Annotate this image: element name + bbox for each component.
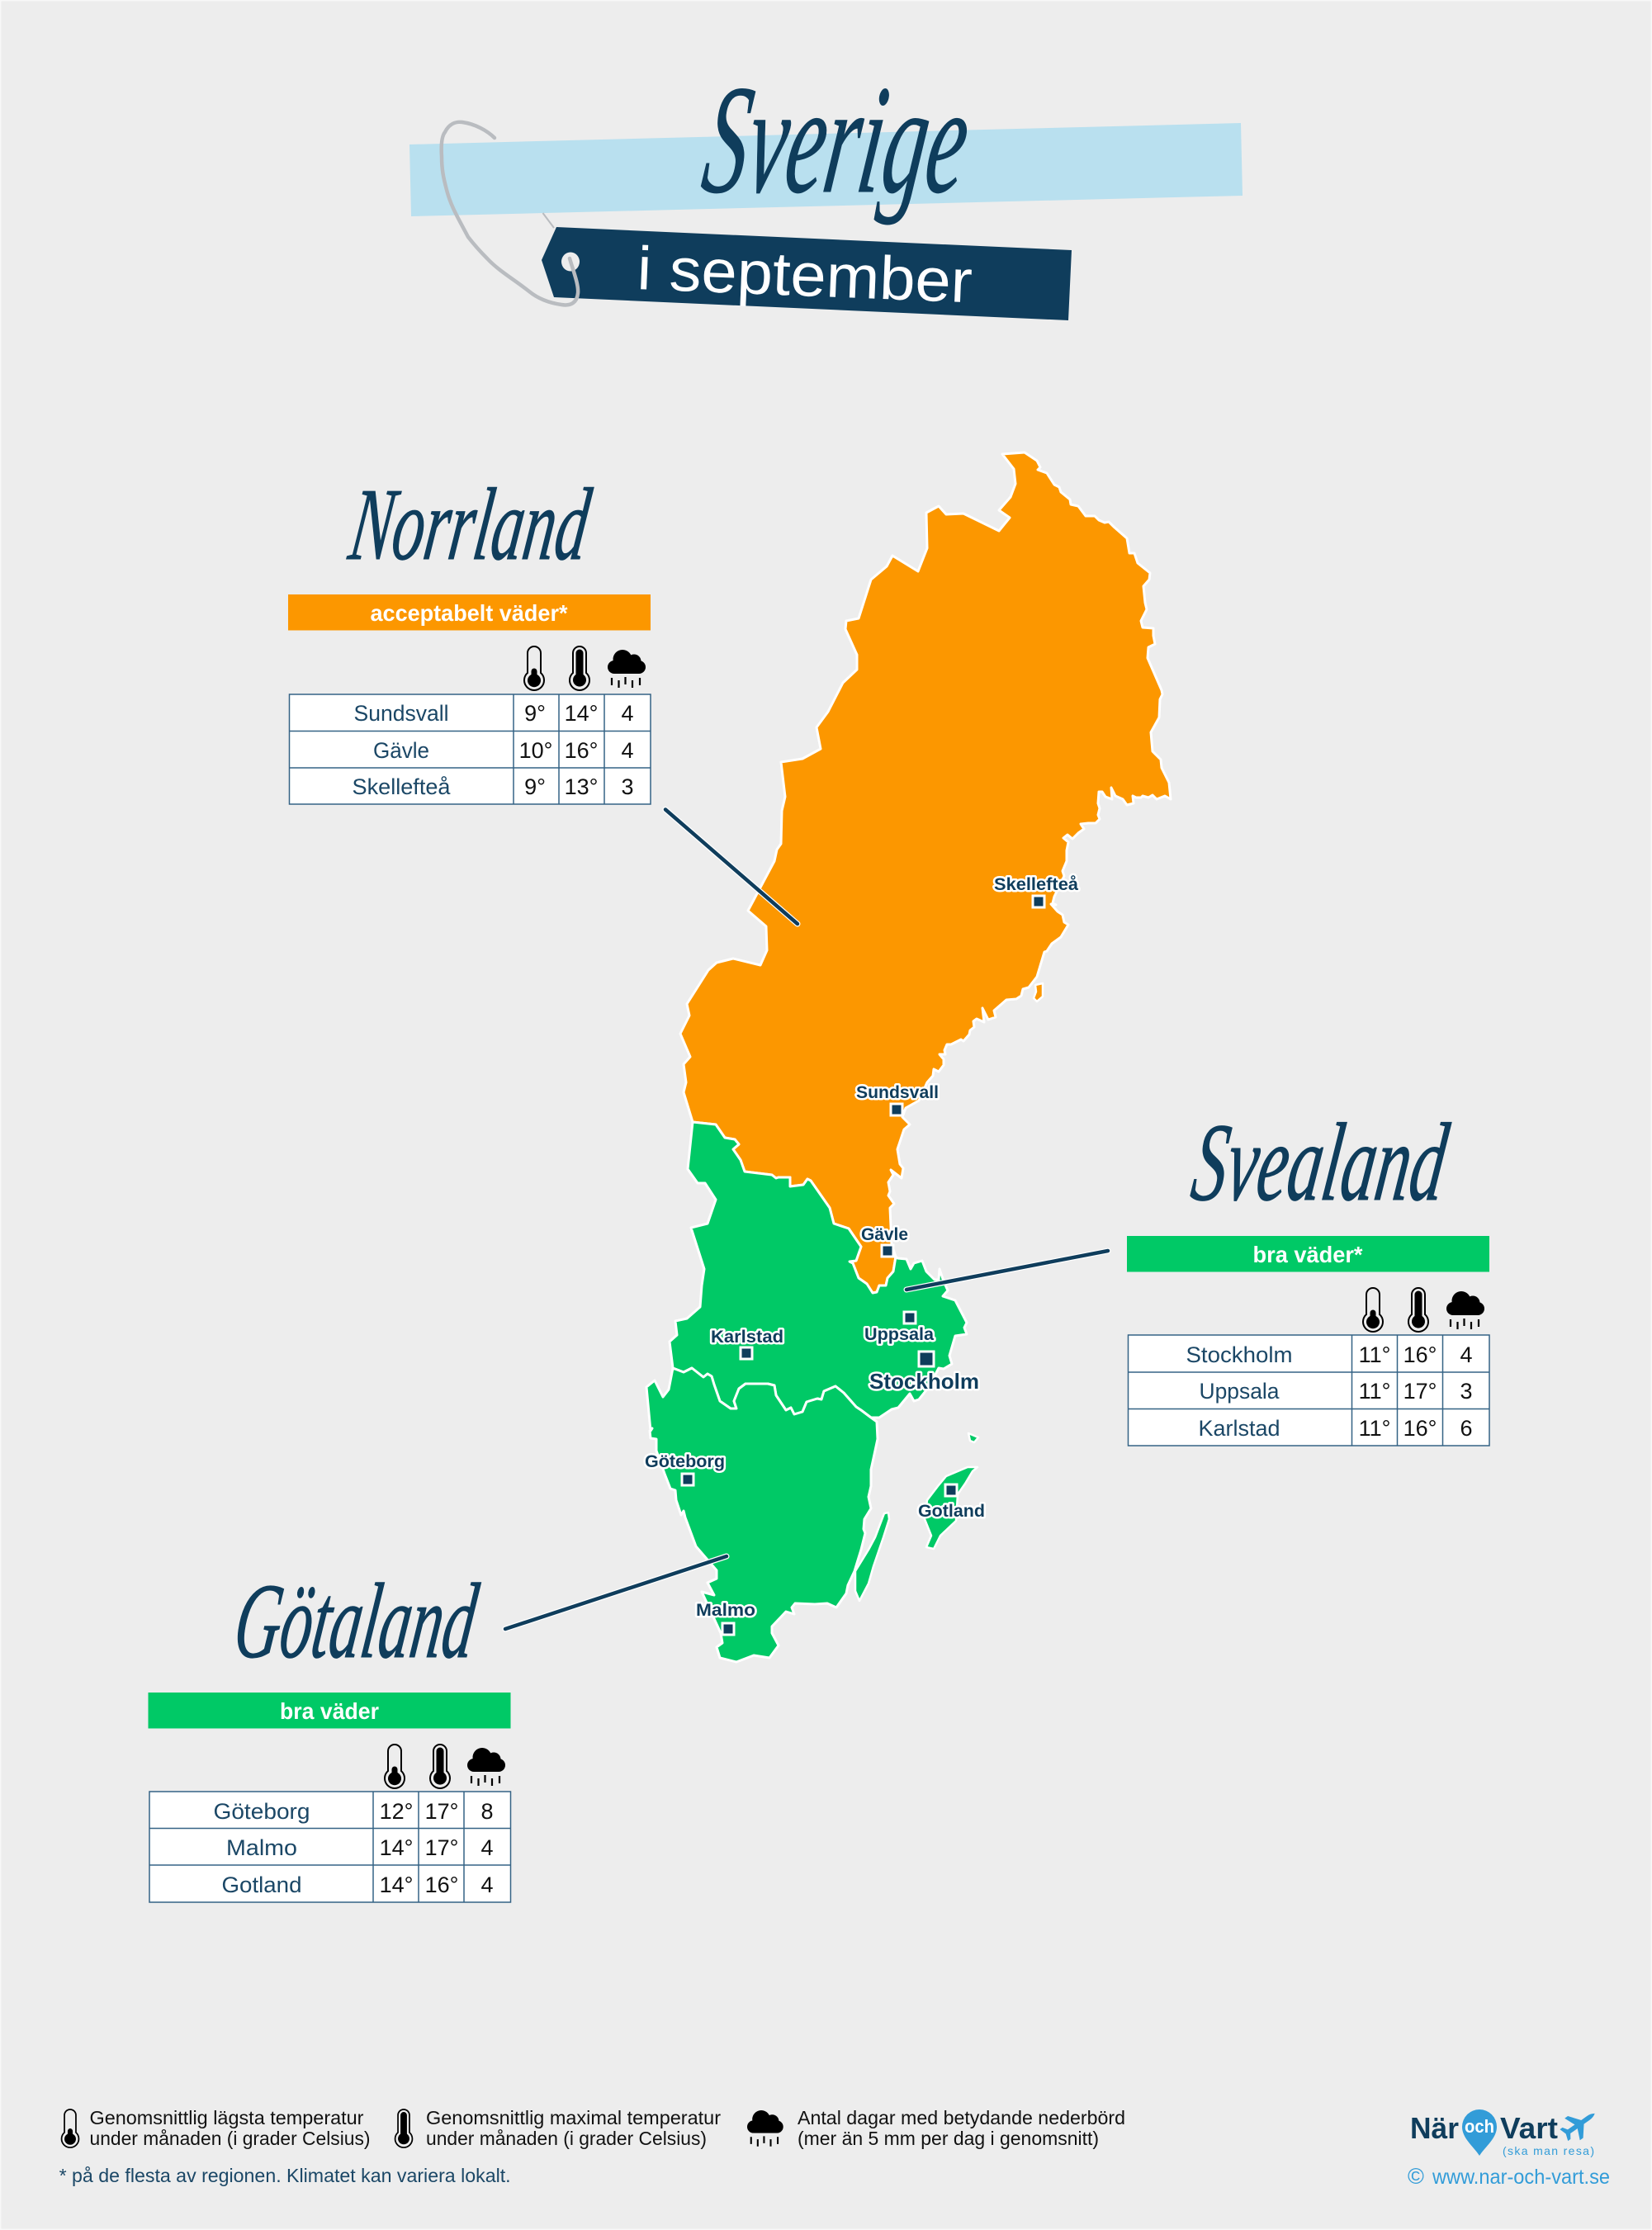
table: Norrland cities: Skellefteå	[352, 774, 451, 799]
copyright mark: ©	[1408, 2164, 1424, 2189]
panel: Svealand	[1127, 1101, 1489, 1446]
city marker: Malmo: Malmo	[696, 1601, 755, 1620]
table: Norrland cities: 3	[621, 774, 634, 799]
icon: low temperature	[385, 1745, 405, 1788]
table: Norrland cities: 13°	[565, 774, 598, 799]
table: Svealand cities: 11°	[1359, 1379, 1390, 1404]
table: Norrland cities: Sundsvall	[353, 701, 449, 726]
icon: airplane	[1556, 2103, 1602, 2146]
map of Sweden	[645, 452, 1171, 1662]
city marker: Skellefteå: Skellefteå	[994, 875, 1078, 894]
table: Norrland cities: 16°	[565, 738, 598, 763]
icon: rain cloud	[608, 650, 646, 688]
icon: low temperature	[524, 646, 544, 690]
logo pin	[1462, 2109, 1497, 2156]
island: Gotland	[925, 1467, 977, 1549]
legend item: low temperature	[62, 2107, 370, 2149]
region: Götaland	[646, 1368, 878, 1662]
table: Svealand cities: Uppsala	[1199, 1379, 1280, 1404]
table: Götaland cities: 17°	[425, 1835, 458, 1860]
logo word: När: När	[1410, 2111, 1459, 2145]
region: Svealand	[670, 1122, 967, 1418]
table: Svealand cities: 4	[1460, 1342, 1473, 1367]
logo word: och: och	[1465, 2116, 1494, 2137]
heading: Svealand: Svealand	[1186, 1101, 1455, 1224]
weather bar: bra väder	[149, 1693, 510, 1729]
panel: Norrland	[288, 468, 651, 804]
legend item: high temperature	[395, 2107, 721, 2149]
heading: Sverige: Sverige	[694, 54, 979, 225]
table: Götaland cities	[149, 1792, 510, 1902]
table: Götaland cities: 12°	[380, 1799, 413, 1824]
table: Götaland cities: Göteborg	[213, 1799, 310, 1824]
legend item: high temperature: Genomsnittlig maximal temperatur	[426, 2107, 721, 2128]
subheading: i september: i september	[636, 234, 973, 315]
table: Norrland cities: 9°	[524, 774, 546, 799]
table: Svealand cities: 6	[1460, 1416, 1473, 1441]
table: Götaland cities: 8	[480, 1799, 494, 1824]
region: Norrland	[680, 452, 1171, 1293]
light blue ribbon	[409, 123, 1243, 216]
city marker: Gotland	[918, 1484, 985, 1521]
city marker: Gotland: Gotland	[918, 1502, 985, 1521]
icon: low temperature	[1363, 1288, 1383, 1332]
legend item: rain days	[747, 2107, 1125, 2149]
table: Svealand cities: 11°	[1359, 1416, 1390, 1441]
table: Götaland cities: 14°	[380, 1873, 413, 1897]
title banner	[409, 54, 1243, 320]
leader line: Götaland	[505, 1556, 727, 1629]
city marker: Malmo	[696, 1601, 755, 1635]
icon: rain cloud	[1446, 1291, 1484, 1329]
table: Svealand cities: 17°	[1403, 1379, 1437, 1404]
table: Svealand cities: 16°	[1403, 1342, 1437, 1367]
table: Götaland cities: 4	[480, 1873, 494, 1897]
table: Norrland cities: 4	[621, 738, 634, 763]
icon: high temperature	[570, 646, 589, 690]
table: Norrland cities: 14°	[565, 701, 598, 726]
logo word: Vart: Vart	[1500, 2111, 1558, 2145]
city marker: Karlstad	[711, 1328, 783, 1359]
leader line: Norrland	[665, 809, 798, 924]
table: Norrland cities: Gävle	[373, 738, 429, 763]
weather bar: acceptabelt väder	[288, 594, 651, 631]
city marker: Göteborg	[645, 1452, 725, 1485]
table: Norrland cities	[289, 694, 651, 804]
table: Götaland cities: Malmo	[226, 1835, 297, 1860]
table: Götaland cities: 16°	[425, 1873, 458, 1897]
table: Svealand cities: 16°	[1403, 1416, 1437, 1441]
city marker: Gävle: Gävle	[861, 1225, 908, 1244]
table: Svealand cities: Stockholm	[1186, 1342, 1293, 1367]
legend item: low temperature: under månaden (i grader Celsius)	[89, 2128, 370, 2149]
weather bar: acceptabelt väder: acceptabelt väder*	[370, 600, 568, 626]
legend item: high temperature: under månaden (i grader Celsius)	[426, 2128, 707, 2149]
website: www.nar-och-vart.se	[1432, 2166, 1610, 2189]
table: Götaland cities: Gotland	[221, 1873, 302, 1897]
city marker: Sundsvall	[856, 1083, 939, 1115]
table: Norrland cities: 4	[621, 701, 634, 726]
table: Norrland cities: 10°	[519, 738, 552, 763]
table: Norrland cities: 9°	[524, 701, 546, 726]
city marker: Skellefteå	[994, 875, 1078, 907]
island: Holmön	[1034, 983, 1043, 1001]
weather bar: bra väder	[1127, 1236, 1489, 1271]
table: Svealand cities: Karlstad	[1199, 1416, 1280, 1441]
leader line: Svealand	[906, 1251, 1108, 1290]
panel: Götaland	[149, 1563, 510, 1902]
city marker: Uppsala: Uppsala	[864, 1325, 934, 1344]
heading: Götaland: Götaland	[228, 1563, 484, 1681]
logo: När och Vart	[1408, 2103, 1610, 2189]
weather bar: bra väder: bra väder	[280, 1698, 379, 1724]
dark label tag	[542, 227, 1072, 320]
city marker: Stockholm	[869, 1352, 979, 1394]
tag string	[543, 213, 554, 228]
legend item: rain days: (mer än 5 mm per dag i genomsnitt)	[798, 2128, 1099, 2149]
icon: rain cloud	[467, 1748, 505, 1786]
tag hole	[561, 253, 580, 271]
city marker: Karlstad: Karlstad	[711, 1328, 783, 1347]
weather bar: bra väder: bra väder*	[1253, 1242, 1363, 1267]
island: Fårö	[968, 1433, 978, 1442]
icon: high temperature	[430, 1745, 450, 1788]
table: Svealand cities: 3	[1460, 1379, 1473, 1404]
city marker: Uppsala	[864, 1312, 934, 1344]
legend item: low temperature: Genomsnittlig lägsta temperatur	[89, 2107, 364, 2128]
tag loop	[442, 122, 578, 305]
table: Götaland cities: 4	[480, 1835, 494, 1860]
city marker: Gävle	[861, 1225, 908, 1257]
legend item: rain days: Antal dagar med betydande nederbörd	[798, 2107, 1125, 2128]
table: Svealand cities	[1128, 1335, 1489, 1446]
table: Svealand cities: 11°	[1359, 1342, 1390, 1367]
island: Öland	[855, 1513, 889, 1601]
table: Götaland cities: 17°	[425, 1799, 458, 1824]
legend	[59, 2107, 1125, 2186]
table: Götaland cities: 14°	[380, 1835, 413, 1860]
icon: high temperature	[1408, 1288, 1428, 1332]
city marker: Stockholm: Stockholm	[869, 1369, 979, 1394]
footnote: * på de flesta av regionen. Klimatet kan variera lokalt.	[59, 2165, 511, 2186]
city marker: Sundsvall: Sundsvall	[856, 1083, 939, 1102]
city marker: Göteborg: Göteborg	[645, 1452, 725, 1471]
logo tagline: (ska man resa)	[1503, 2144, 1594, 2157]
heading: Norrland: Norrland	[343, 468, 597, 582]
